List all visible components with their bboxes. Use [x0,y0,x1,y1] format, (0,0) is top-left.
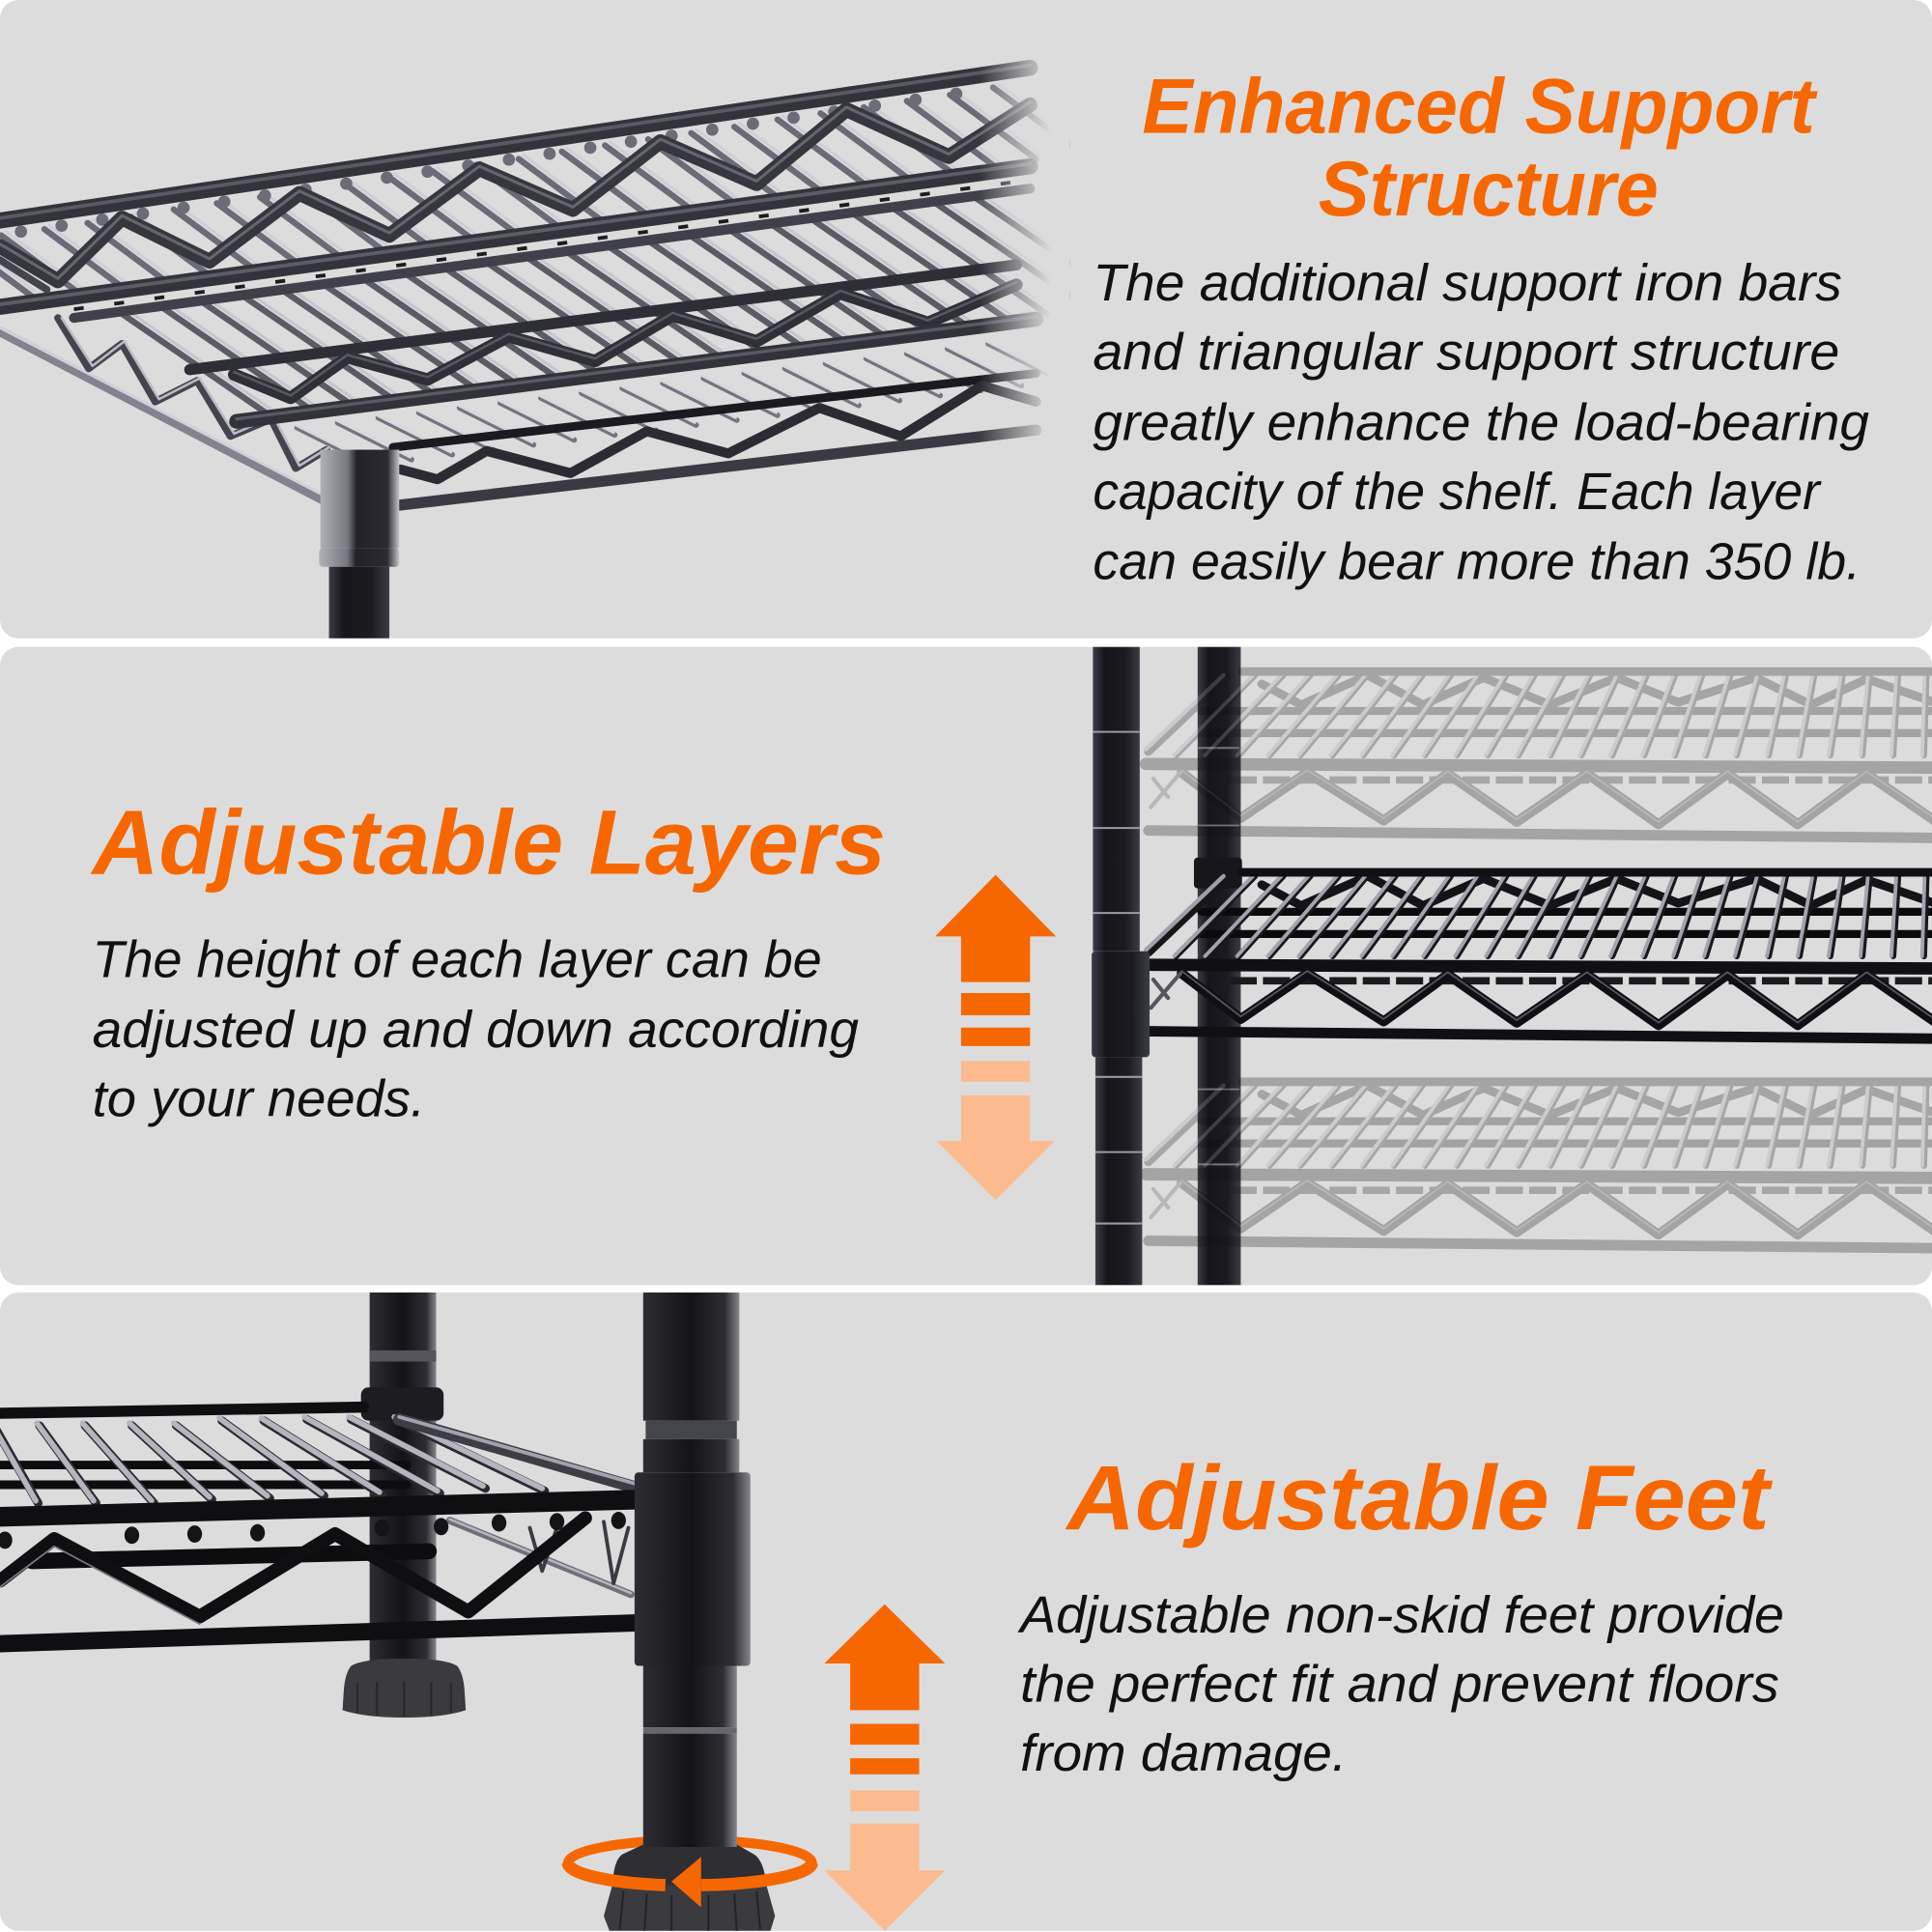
text block: layers description: to your needs. [93,1071,425,1128]
arrow: up and down adjustment [935,875,1056,1200]
panel background 3 [0,1293,1932,1931]
heading: adjustable layers: Adjustable Layers [91,792,886,894]
text block: support description: capacity of the shelf. Each layer [1093,464,1822,521]
panel background 2 [0,647,1932,1285]
panel: adjustable feet [0,1293,1932,1932]
panel background 1 [0,0,1932,639]
photo: wire shelf corner with support bars [0,60,1070,639]
text block: support description: The additional support iron bars [1093,255,1842,312]
heading: adjustable feet: Adjustable Feet [1065,1448,1773,1549]
text block: support description: and triangular support structure [1093,325,1839,382]
photo: shelf on posts with ghosted positions [1092,647,1932,1285]
panel: enhanced support structure [0,0,1932,640]
arrow: foot height adjustment [824,1605,945,1931]
photo: shelf corner and adjustable foot [0,1293,812,1932]
heading: enhanced support structure: Structure [1319,146,1659,233]
text block: layers description: The height of each layer can be [93,931,822,988]
text block: feet description: Adjustable non-skid feet provide [1017,1587,1784,1644]
text block: support description: greatly enhance the load-bearing [1093,394,1869,451]
text block: layers description: adjusted up and down according [93,1002,859,1059]
panel: adjustable layers [0,647,1932,1285]
text block: support description: can easily bear more than 350 lb. [1093,533,1861,590]
text block: feet description: from damage. [1020,1725,1347,1782]
heading: enhanced support structure: Enhanced Support [1142,64,1818,151]
text block: feet description: the perfect fit and prevent floors [1020,1656,1779,1713]
arrow: foot rotation ring [568,1857,812,1907]
